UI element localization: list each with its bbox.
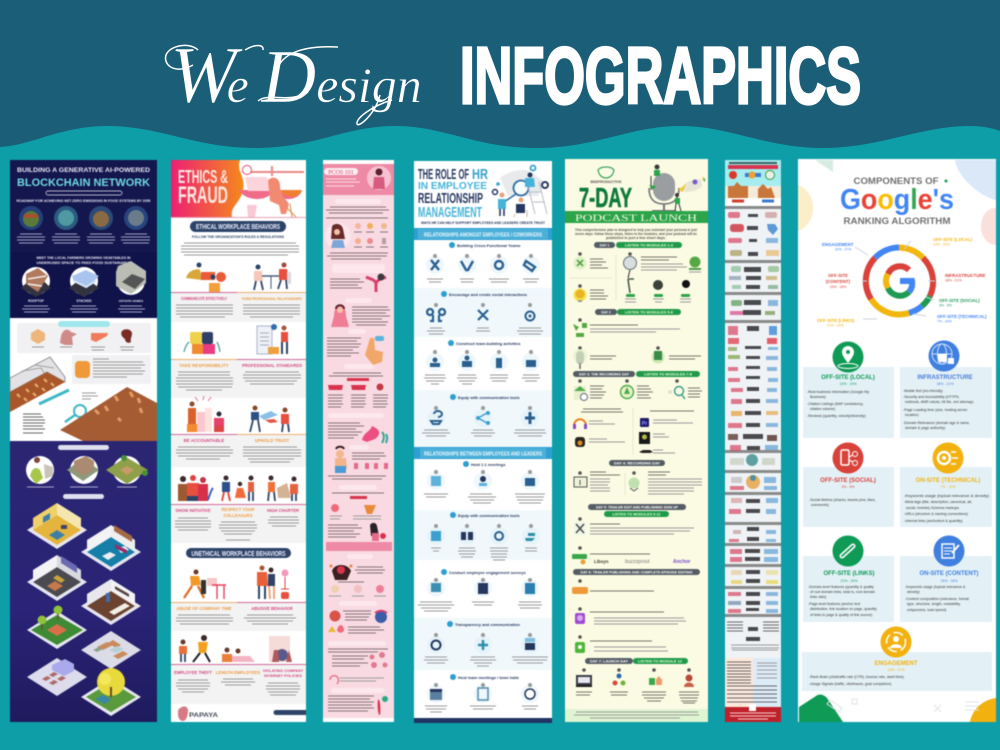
section: transparency (424, 621, 548, 666)
section bars (725, 206, 781, 617)
HR illustration (492, 166, 548, 217)
woman with icons (328, 447, 388, 479)
gray box with food icons (17, 321, 151, 353)
day 1 pill: DAY 1 (600, 244, 609, 248)
section: engagement surveys: Conduct employee engagement surveys (449, 570, 526, 575)
card: infrastructure: domain & page authority) (905, 426, 945, 430)
panel: 7-day podcast launch infographic (565, 159, 708, 722)
day 5 pills: LISTEN TO MODULES 9-11 (612, 512, 661, 516)
dark center labels (743, 214, 763, 641)
day 7 pill: DAY 7: LAUNCH DAY (590, 660, 629, 664)
card: off-site links: of links to page & quality of link source) (810, 613, 872, 617)
row 1 text blocks: COMMUNICATE EFFECTIVELY (181, 296, 227, 301)
HR title: WAYS HR CAN HELP SUPPORT EMPLOYEES AND LEADERS CREATE TRUST (421, 221, 546, 225)
section: town halls (425, 674, 539, 712)
donut labels: OFF-SITE (LINKS) (817, 318, 855, 323)
divider bar (171, 217, 306, 218)
intro text: published in just a few short days. (606, 236, 666, 240)
cell illustration (329, 564, 386, 596)
row 5 illustrations (184, 566, 289, 599)
panel: ethics and fraud infographic (171, 160, 306, 722)
bottom strip (323, 718, 394, 722)
day 6 pill (573, 569, 700, 575)
heading: meet the local farmers (36, 256, 131, 265)
day 2 pill: DAY 2 (601, 310, 611, 314)
card: on-site content (900, 536, 992, 622)
risk list (328, 649, 388, 684)
row 4 text blocks: SHOW INITIATIVE (175, 508, 211, 513)
banner: employees and leaders: RELATIONSHIPS BETWEEN EMPLOYEES AND LEADERS (424, 452, 542, 458)
day 4 items (574, 471, 702, 495)
row 3 text blocks: UPHOLD TRUST (255, 438, 290, 443)
donut labels: 7% - 10% (937, 320, 952, 324)
row 4 text blocks (171, 504, 306, 543)
podcast heading (579, 167, 632, 213)
day 1 pill: LISTEN TO MODULES 1-4 (625, 244, 673, 248)
row 6 text blocks: VIOLATING COMPANY (263, 669, 304, 673)
heading: blockchain (16, 168, 151, 203)
row 5 text blocks: ABUSE OF COMPANY TIME (177, 606, 232, 611)
donut chart with G (866, 248, 933, 314)
right coloured items (762, 212, 779, 613)
section: equip tools: Equip with communication tools (458, 513, 520, 518)
card: off-site links: -Domain-level features (quantity & quality (808, 585, 874, 589)
day 6 items (572, 579, 686, 653)
card: on-site technical: 7% - 10% (940, 485, 956, 489)
heading: meet the local farmers: MEET THE LOCAL FARMERS GROWING VEGETABLES IN (36, 256, 131, 260)
hormone chart (328, 493, 386, 541)
card: infrastructure: -Domain Relevance (domain age & name, (903, 421, 970, 425)
section pills (328, 199, 386, 693)
row 2 text blocks: TAKE RESPONSIBILITY (179, 363, 229, 368)
card: off-site links: OFF-SITE (LINKS) (824, 571, 874, 577)
banner: employees and leaders (414, 447, 552, 459)
row 6 illustrations (179, 635, 292, 662)
day 7 pill (585, 658, 688, 664)
heading: ethical workplace behaviors: ETHICAL WORKPLACE BEHAVIORS (196, 224, 280, 231)
card: on-site content: -Keywords usage (topical relevance & (905, 585, 966, 589)
podcast heading: BEEPRODUCTIVE (591, 180, 622, 184)
pill: service segments (58, 445, 109, 450)
bottom decorative shapes (799, 695, 996, 722)
donut labels: 19% - 27% (835, 248, 851, 252)
day 3 pill: LISTEN TO MODULES 7-8 (644, 372, 692, 376)
row 6 text blocks: EMPLOYEE THEFT (174, 670, 212, 675)
donut labels: (CONTENT) (826, 279, 851, 284)
day 2 pill: LISTEN TO MODULES 5-6 (625, 310, 673, 314)
card: off-site links: of root domain links, total rs, root domain (810, 590, 875, 594)
card: engagement: ENGAGEMENT (874, 661, 918, 667)
day 3 pill (573, 371, 700, 377)
card: on-site content: 15% - 18% (940, 579, 958, 583)
HR title: RELATIONSHIP (418, 190, 483, 207)
card: infrastructure (900, 340, 992, 438)
HR title: THE ROLE OF (418, 166, 469, 183)
thermometer and magnifier (23, 390, 98, 433)
card: on-site technical: -Internal links (anchortext & quantity) (904, 519, 963, 523)
row 4 text blocks: RESPECT YOUR (222, 507, 254, 512)
heading: blockchain: ROADMAP FOR ACHIEVING NET-ZERO EMISSIONS IN FOOD SYSTEMS BY 2050 (16, 199, 150, 203)
bottom text and figure (328, 696, 388, 715)
pink leaf illustration (328, 423, 387, 443)
title script: We Design: We Design (170, 32, 422, 120)
card: infrastructure: -Security and Accessibility (HTTPS, (903, 395, 960, 399)
title (166, 31, 861, 125)
card: on-site content: -Content composition (relevance, format (905, 597, 969, 601)
section: team-building activities (424, 340, 540, 384)
row 4 text blocks: COLLEAGUES (223, 513, 253, 518)
header band with wave edge (0, 0, 1000, 148)
intro text: seven days: follow these steps, listen to the modules, and your podcast will be (575, 232, 697, 236)
banner: coworkers: RELATIONSHIPS AMONGST EMPLOYEES / COWORKERS (424, 232, 542, 238)
card: infrastructure: redirects, AMR robots, htt file, xml sitemap) (905, 400, 974, 404)
header: ethics and fraud (171, 160, 304, 217)
donut labels: ENGAGEMENT (822, 242, 854, 247)
farm type icons: ROOFTOP (28, 299, 45, 303)
row 5 text blocks: ABUSIVE BEHAVIOR (251, 606, 293, 611)
PCOS header (323, 160, 394, 195)
card: off-site social: 3% - 5% (841, 485, 855, 489)
info box: vertical farm (72, 355, 151, 384)
donut labels: OFF-SITE (828, 273, 848, 278)
card: off-site social: OFF-SITE (SOCIAL) (820, 478, 876, 484)
donut labels: 21% - 24% (827, 324, 844, 328)
section: social interactions (427, 291, 543, 334)
day 6 pill: DAY 6: TRAILER PUBLISHING AND COMPLETE EPISODE EDITING (580, 570, 693, 574)
treatment columns (328, 373, 388, 407)
donut labels: 3% - 5% (939, 304, 952, 308)
HR title (418, 166, 546, 225)
summary rows (727, 454, 779, 650)
HR title: IN EMPLOYEE (418, 181, 487, 192)
recording software lists (573, 408, 694, 455)
panel: role of HR infographic (414, 161, 552, 723)
day 3 pill: DAY 3: THE RECORDING DAY (579, 372, 630, 376)
uterus illustration (330, 274, 386, 292)
day 4 pill: DAY 4: RECORDING DAY (614, 462, 661, 466)
card: infrastructure: -Page Loading time (size, hosting server (903, 408, 968, 412)
card: off-site links: -Page-level features (anchor text (808, 602, 860, 606)
isometric room tiles (27, 503, 141, 716)
card: off-site local: Business) (810, 395, 826, 399)
banner: coworkers (414, 228, 552, 240)
row 1 text blocks (171, 292, 306, 322)
row 4 illustrations (178, 475, 298, 501)
card: on-site technical: -URLs (structure & naming conventions) (904, 512, 968, 516)
day 2 pill (595, 309, 681, 315)
panel: PCOS infographic (323, 160, 394, 722)
day 5 pills (588, 504, 686, 517)
section: one-on-one meetings (424, 461, 545, 503)
card: engagement (802, 626, 992, 691)
header: ethics and fraud: FRAUD (178, 182, 228, 209)
donut labels: OFF-SITE (LOCAL) (933, 237, 973, 242)
hand illustration (327, 336, 384, 365)
day 1 items (570, 252, 701, 302)
card: off-site social: comments) (811, 503, 829, 507)
footer: papaya logo (178, 706, 306, 721)
footer note (565, 709, 708, 722)
donut labels: 15% - 18% (830, 285, 846, 289)
donut labels: INFRASTRUCTURE (945, 273, 986, 278)
section: social interactions: Encourage and create social interactions (449, 292, 528, 297)
HR title: MANAGEMENT (418, 205, 482, 221)
farm type icons (21, 261, 146, 312)
farm type icons: STACKED (76, 299, 92, 303)
rocket illustration (678, 176, 705, 192)
section: team-building activities: Construct team-building activities (456, 341, 521, 346)
section: communication tools (422, 394, 546, 436)
card: on-site technical: -Meta tags (title, description, canonical, alt, (904, 500, 972, 504)
closing notes (725, 658, 781, 708)
roadmap circles (17, 206, 150, 243)
Google heading: COMPONENTS OF (854, 176, 939, 186)
left coloured items (728, 212, 744, 613)
row 6 text blocks: LENGTH EMPLOYEES (216, 670, 260, 675)
recording software lists: Pr (642, 421, 647, 427)
card: off-site social: -Social Metrics (shares, tweets pins, likes, (809, 498, 876, 502)
decorative corner shapes (798, 160, 996, 245)
intro text: This comprehensive plan is designed to help you outsmart your persona in just (575, 228, 698, 232)
row 4 text blocks: HIGH CHARTER (267, 508, 299, 513)
card: on-site technical: ON-SITE (TECHNICAL) (916, 478, 980, 484)
day 5 items: buzzsprout (625, 559, 650, 565)
panel: blockchain network infographic (10, 160, 157, 722)
day 5 items (572, 517, 694, 565)
row 3 illustrations (187, 396, 289, 432)
heading: blockchain: BLOCKCHAIN NETWORK (17, 177, 150, 189)
card: infrastructure: INFRASTRUCTURE (917, 375, 973, 381)
card: engagement: -Usage Signals (traffic, clicktraces, goal completion) (809, 682, 891, 686)
microphone illustration (649, 164, 681, 211)
card: on-site technical: -Keywords usage (topical relevance & density) (904, 494, 989, 498)
card: off-site links: 21% - 24% (840, 579, 858, 583)
donut labels: OFF-SITE (TECHNICAL) (937, 314, 987, 319)
farm type icons: OFFSITE HOMES (119, 299, 143, 303)
Google heading: Google's (840, 184, 954, 216)
podcast heading: 7-DAY (579, 182, 632, 213)
card: engagement: -Rank Brain (clicktraffic rate (CTR), bounce rate, dwell time) (809, 675, 904, 679)
day 5 pills: DAY 5: TRAILER EDIT AND PUBLISHING SIGN UP (596, 506, 679, 510)
HR title: HR (472, 166, 488, 183)
card: on-site technical (900, 442, 992, 527)
footer bar (414, 718, 552, 723)
PCOS symptoms row (325, 207, 389, 259)
day 2 items (573, 318, 701, 369)
red footer (725, 704, 781, 722)
donut labels: 18% - 21% (945, 278, 962, 282)
row 3 text blocks (171, 434, 306, 467)
section: cross-functional teams: Building Cross-Functional Teams (457, 243, 521, 248)
donut labels: OFF-SITE (SOCIAL) (939, 298, 980, 303)
card: off-site links: links ratio) (810, 595, 826, 599)
center G logo (886, 266, 912, 296)
section: equip tools (427, 512, 540, 560)
day 5 items: Anchor (673, 559, 691, 565)
row 6 text blocks (171, 664, 306, 704)
heading: meet the local farmers: UNDERUSED SPACE TO FEED FOOD SUSTAINABLY (36, 261, 131, 265)
woman with description (331, 305, 390, 327)
day 7 items (576, 668, 699, 703)
card: off-site local: -Reviews (quantity, velocity/diversity) (807, 414, 866, 418)
row 6 text blocks: INTERNET POLICIES (264, 674, 302, 678)
intro text (575, 228, 698, 240)
card: on-site technical: social, hreinks) Schema markups (906, 506, 959, 510)
day 1 pill (594, 242, 682, 248)
card: infrastructure: location) (905, 413, 919, 417)
section: one-on-one meetings: Hold 1:1 meetings (471, 462, 506, 467)
row 3 text blocks: BE ACCOUNTABLE (184, 438, 224, 443)
day 5 items: Libsyn (594, 559, 609, 564)
heading: blockchain: BUILDING A GENERATIVE AI-POWERED (17, 168, 151, 174)
heading: unethical workplace behaviors: UNETHICAL WORKPLACE BEHAVIORS (192, 551, 286, 558)
card: off-site local: -Citation Listings (NAP consistency, (807, 402, 864, 406)
customer circles (26, 455, 148, 487)
row 1 text blocks: FORM PROFESSIONAL RELATIONSHIPS (242, 297, 302, 301)
card: off-site local: citation volume) (810, 407, 835, 411)
row 1 illustrations (186, 262, 291, 292)
card: on-site content: uniqueness, load speed) (907, 608, 946, 612)
card: engagement: 19% - 27% (887, 668, 905, 672)
row 2 illustrations (184, 324, 288, 354)
card: infrastructure: -Mobile first (mo-friendly) (903, 389, 943, 393)
row 2 text blocks: PROFESSIONAL STANDARDS (242, 363, 302, 368)
card: on-site content: ON-SITE (CONTENT) (920, 571, 978, 577)
Google heading: RANKING ALGORITHM (844, 216, 950, 226)
card: off-site local: OFF-SITE (LOCAL) (821, 375, 875, 381)
heading: ethical workplace behaviors (181, 221, 299, 255)
heading: ethical workplace behaviors: FOLLOW THE ORGANIZATION'S RULES & REGULATIONS (192, 234, 284, 239)
day 4 pill (609, 460, 665, 466)
panel: long comparison infographic (725, 160, 781, 722)
greenhouse illustration (10, 357, 65, 412)
row 2 text blocks (171, 359, 306, 398)
donut labels (817, 237, 987, 328)
section: town halls: Host team meetings / town halls (458, 675, 520, 680)
heading: unethical workplace behaviors (186, 548, 291, 558)
comparison header (725, 160, 781, 206)
card: off-site local: 13% - 19% (839, 382, 857, 386)
row 5 text blocks (171, 602, 306, 631)
section: communication tools: Equip with communication tools (458, 395, 520, 400)
day 7 pill: LISTEN TO MODULE 12 (638, 660, 682, 664)
pink callout bar (326, 542, 392, 551)
card: off-site local (803, 342, 894, 438)
panel: Google ranking algorithm infographic (798, 159, 996, 722)
card: off-site links (803, 536, 894, 622)
section: engagement surveys (418, 569, 542, 611)
card: on-site content: type, structure, length, readability, (907, 602, 961, 606)
card: off-site links: distribution, link location on page, quantity (810, 607, 877, 611)
day 3 items (574, 379, 702, 400)
pill: vendor products (63, 494, 104, 499)
banner: podcast launch (565, 211, 708, 223)
PCOS header: PCOS 101 (328, 170, 354, 176)
card: off-site social (803, 442, 894, 527)
donut labels: 13% - 19% (933, 242, 950, 246)
section: cross-functional teams (426, 242, 540, 282)
banner: podcast launch: PODCAST LAUNCH (575, 213, 698, 223)
card: infrastructure: 18% - 21% (936, 382, 954, 386)
card: off-site local: -Real business information (Google My (807, 390, 869, 394)
footer: papaya logo: PAPAYA (189, 712, 218, 719)
section: transparency: Transparency and communication (455, 622, 520, 627)
Google heading (840, 176, 954, 226)
header: ethics and fraud: ETHICS & (178, 167, 228, 187)
diet items (328, 610, 387, 633)
card: on-site content: density) (907, 590, 920, 594)
soil plot (60, 387, 157, 441)
